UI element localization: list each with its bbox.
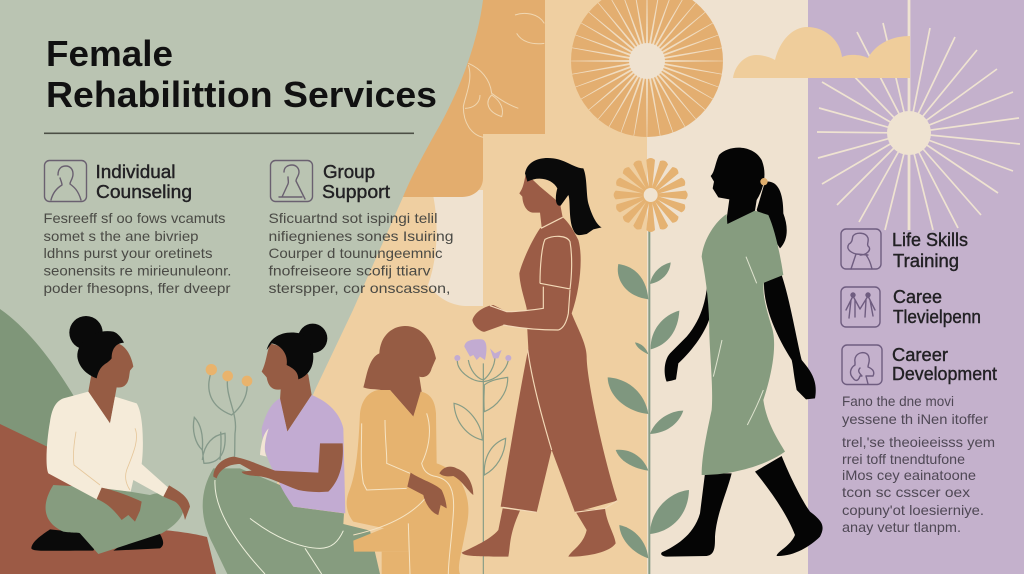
career description text	[842, 393, 995, 535]
service: individual counseling	[44, 160, 232, 296]
title	[46, 33, 437, 115]
heading	[892, 345, 997, 384]
heading: Individual	[96, 162, 176, 182]
icon: person with scarf	[841, 229, 881, 269]
description: nifiegnienes sones Isuiring	[268, 228, 454, 244]
line art on orange block	[463, 13, 544, 137]
cloud	[733, 27, 910, 78]
description: Sficuartnd sot ispingi telil	[268, 210, 438, 226]
heading	[96, 162, 192, 202]
heading	[893, 287, 981, 327]
career description text: Fano the dne movi	[842, 393, 954, 409]
heading: Caree	[893, 287, 942, 307]
description: Fesreeff sf oo fows vcamuts	[44, 210, 226, 226]
career description text: copuny'ot loesierniye.	[842, 502, 984, 518]
heading: Life Skills	[892, 230, 968, 250]
career description text: trel,'se theoieeisss yem	[842, 434, 995, 450]
bench	[353, 518, 408, 552]
description	[268, 210, 454, 296]
career description text: yessene th iNen itoffer	[842, 411, 988, 427]
description: somet s the ane bivriep	[44, 228, 199, 244]
woman 1: cream top, cross-legged	[31, 316, 190, 554]
plant: orange flower with sage leaves	[608, 158, 689, 574]
heading: Career	[892, 345, 948, 365]
woman walking: sage dress	[661, 148, 823, 557]
icon: two people	[841, 287, 880, 327]
description: poder fhesopns, ffer dveepr	[44, 280, 231, 296]
heading: Training	[893, 251, 959, 271]
description: Courper d tounungeemnic	[268, 245, 442, 261]
heading: Group	[323, 162, 375, 182]
career description text: iMos cey eainatoone	[842, 467, 976, 483]
career description text: tcon sc csscer oex	[842, 484, 970, 500]
icon: person in frame	[270, 160, 312, 202]
cream sunburst on lilac	[817, 0, 1020, 230]
title: Female	[46, 33, 173, 74]
description: sterspper, cor onscasson,	[268, 280, 450, 296]
woman 3: orange outfit	[347, 326, 473, 574]
description: ldhns purst your oretinets	[44, 245, 212, 261]
title rule	[44, 132, 414, 134]
woman walking: brown jumpsuit	[462, 158, 617, 557]
large orange sunburst	[571, 0, 723, 137]
plant: lilac flower and stem	[454, 339, 511, 574]
woman 2: lilac top	[203, 324, 380, 574]
service: career development	[842, 345, 997, 384]
career description text: rrei toff tnendtufone	[842, 451, 965, 467]
scene: seated women and plants	[31, 316, 473, 574]
service: caree tlevielpenn	[841, 287, 981, 327]
heading	[892, 230, 968, 271]
title: Rehabilittion Services	[46, 74, 437, 115]
description: seonensits re mirieunuleonr.	[44, 262, 232, 278]
description: fnofreiseore scofij ttiarv	[268, 262, 430, 278]
plant: orange buds	[193, 364, 252, 463]
service: life skills training	[841, 229, 968, 271]
heading: Development	[892, 364, 997, 384]
icon: person with folded arms	[842, 345, 882, 384]
description	[44, 210, 232, 296]
heading: Counseling	[96, 182, 192, 202]
heading: Support	[322, 182, 390, 202]
service: group support	[268, 160, 454, 296]
career description text: anay vetur tlanpm.	[842, 519, 961, 535]
ground: hill and soil	[0, 309, 216, 574]
icon: person	[44, 160, 86, 202]
heading: Tlevielpenn	[893, 307, 981, 327]
heading	[322, 162, 390, 202]
